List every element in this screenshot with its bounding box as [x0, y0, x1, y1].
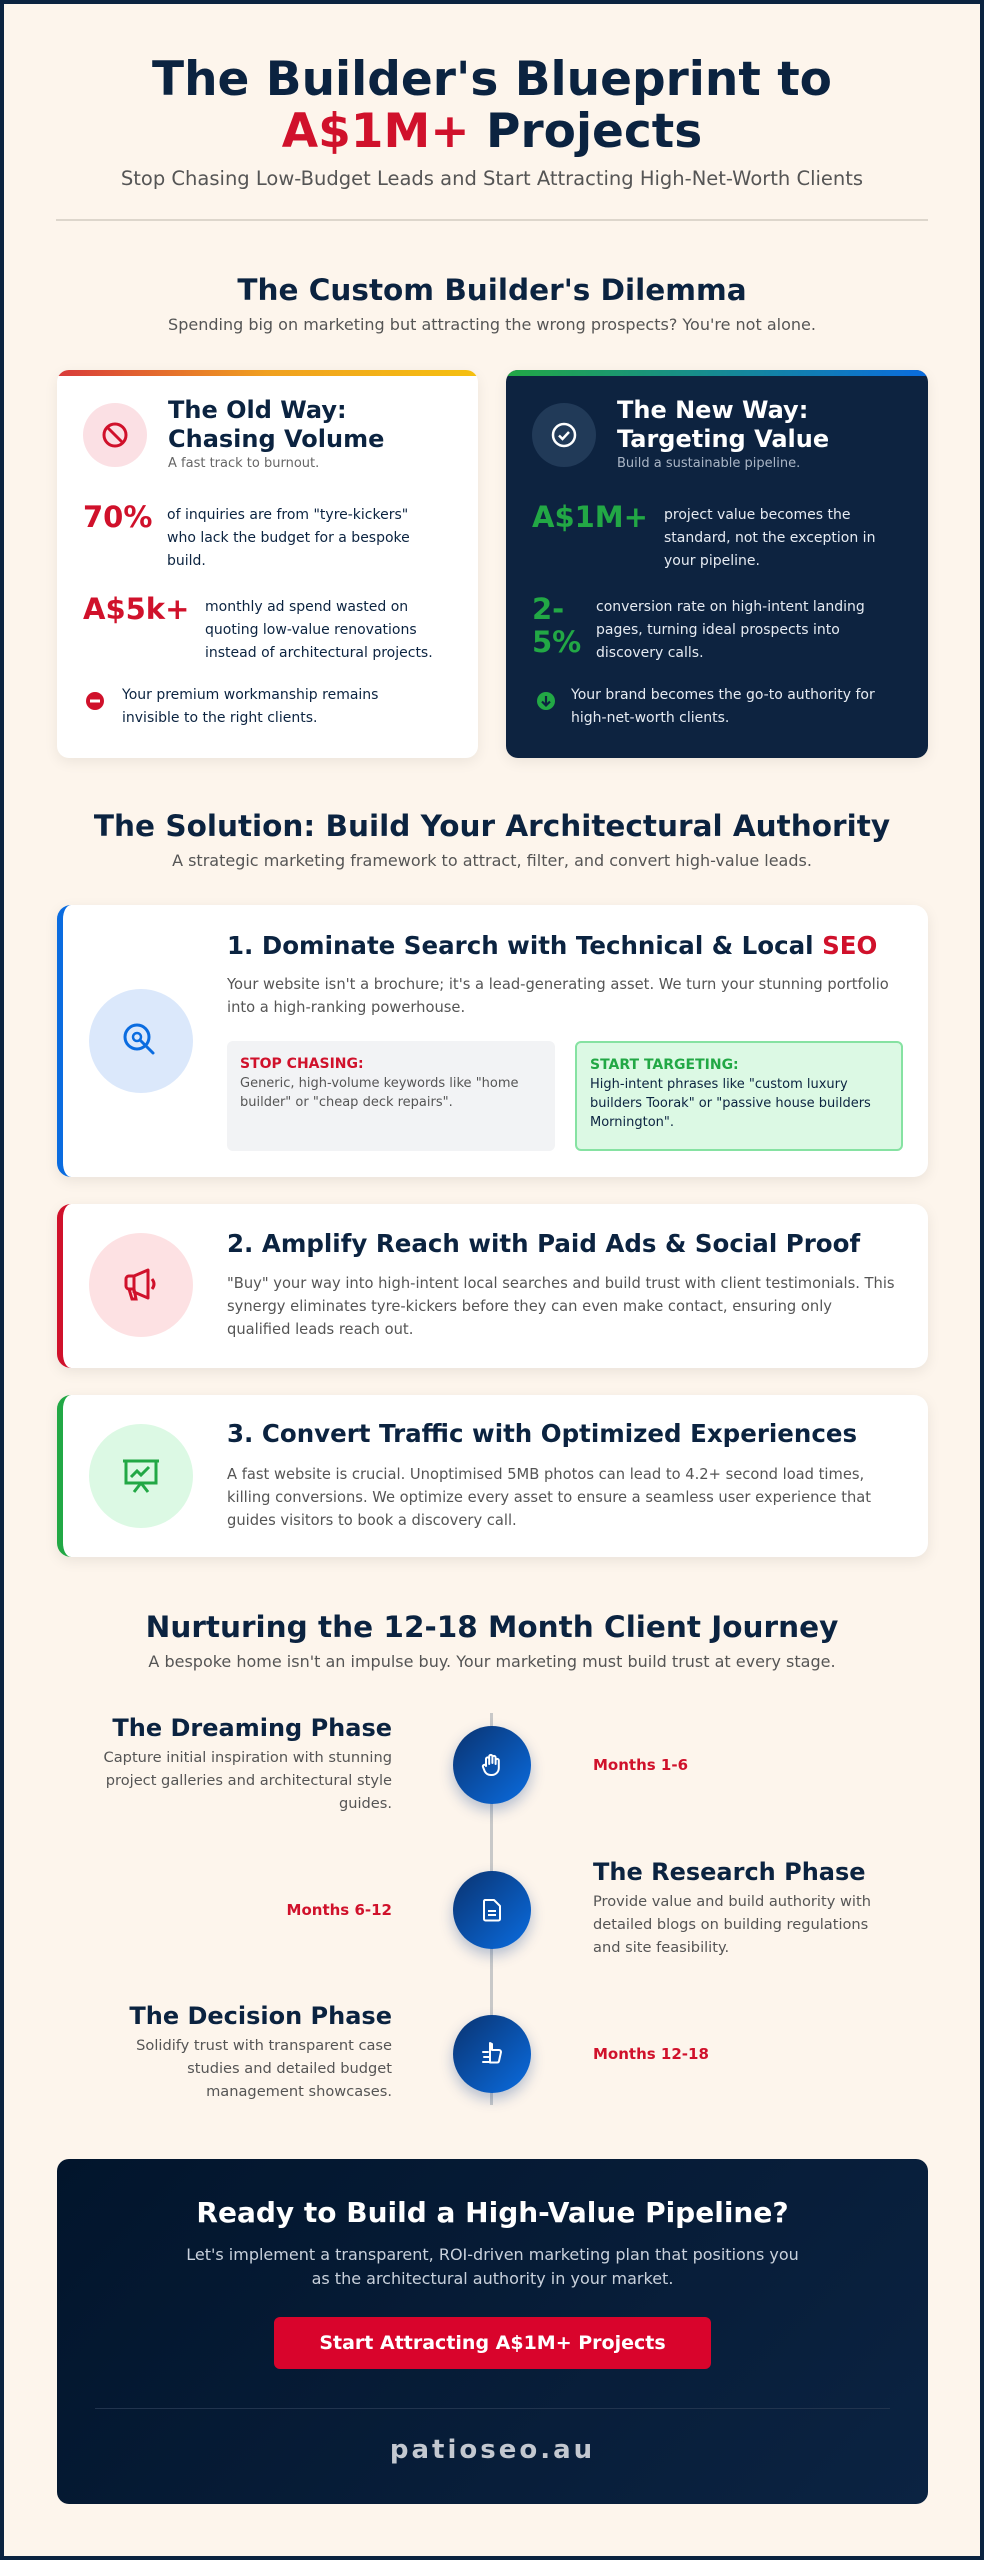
step 3 title: 3. Convert Traffic with Optimized Experiences	[227, 1419, 857, 1448]
timeline	[104, 1713, 871, 2106]
box: stop chasing	[227, 1041, 555, 1151]
months 6-12: Months 6-12	[287, 1901, 392, 1919]
box: start targeting: START TARGETING:	[590, 1057, 739, 1073]
panel: step 3 convert	[57, 1395, 928, 1557]
brand: patioseo.au	[390, 2435, 595, 2465]
step 1 text: Your website isn't a brochure; it's a lead-generating asset. We turn your stunning portfolio into a high-ranking powerhouse.	[227, 976, 889, 1016]
step 2 text: "Buy" your way into high-intent local searches and build trust with client testimonials. This synergy eliminates tyre-kickers before they can even make contact, ensuring only qualified leads reach out.	[227, 1275, 895, 1338]
heading: journey: Nurturing the 12-18 Month Client Journey	[146, 1610, 838, 1644]
stat 2-5%	[532, 592, 581, 659]
panel: new way	[506, 370, 928, 758]
icon: search	[89, 989, 193, 1093]
heading: dilemma: The Custom Builder's Dilemma	[237, 273, 747, 307]
step 1 title: 1. Dominate Search with Technical & Local SEO	[227, 931, 877, 960]
button	[274, 2317, 711, 2369]
icon: check	[532, 403, 596, 467]
panel: new way: Build a sustainable pipeline.	[617, 456, 800, 471]
phase: decision: The Decision Phase	[129, 2002, 392, 2030]
phase: dreaming	[104, 1714, 392, 1812]
CTA text: Let's implement a transparent, ROI-driven marketing plan that positions you	[186, 2245, 799, 2264]
new way heading: The New Way:	[617, 396, 808, 424]
bullet: invisible	[86, 692, 104, 710]
phase: decision	[129, 2002, 392, 2100]
title: The Builder's Blueprint to	[152, 52, 832, 107]
panel: step 1 SEO	[57, 905, 928, 1177]
icon: megaphone	[89, 1233, 193, 1337]
stat 70%: 70%	[83, 500, 152, 534]
panel: new way: Your brand becomes the go-to authority for high-net-worth clients.	[571, 687, 875, 726]
stat 2-5%: 5%	[532, 625, 581, 659]
title	[152, 52, 832, 159]
title: A$1M+ Projects	[282, 104, 702, 159]
CTA heading: Ready to Build a High-Value Pipeline?	[196, 2196, 789, 2229]
subtitle: Stop Chasing Low-Budget Leads and Start Attracting High-Net-Worth Clients	[121, 167, 863, 190]
phase: research	[593, 1858, 871, 1956]
months 12-18: Months 12-18	[593, 2045, 709, 2063]
months 1-6: Months 1-6	[593, 1756, 688, 1774]
icon: thumbs up	[453, 2015, 531, 2093]
journey subtitle: A bespoke home isn't an impulse buy. Your marketing must build trust at every stage.	[148, 1652, 836, 1671]
phase: dreaming: The Dreaming Phase	[112, 1714, 392, 1742]
bullet: authority	[537, 692, 555, 710]
heading: solution: The Solution: Build Your Architectural Authority	[94, 809, 890, 843]
panel: new way: conversion rate on high-intent landing pages, turning ideal prospects into discovery calls.	[596, 599, 865, 661]
panel: step 2 ads	[57, 1204, 928, 1368]
panel: old way	[57, 370, 478, 758]
dilemma subtitle: Spending big on marketing but attracting the wrong prospects? You're not alone.	[168, 315, 816, 334]
old way heading	[168, 396, 384, 453]
phase: research: Provide value and build authority with detailed blogs on building regulations and site feasibility.	[593, 1893, 871, 1956]
stat A$5k+: A$5k+	[83, 592, 189, 626]
step 2 title: 2. Amplify Reach with Paid Ads & Social Proof	[227, 1229, 860, 1258]
panel: old way: Your premium workmanship remains invisible to the right clients.	[122, 687, 378, 726]
CTA text: as the architectural authority in your market.	[312, 2269, 673, 2288]
new way heading	[617, 396, 829, 453]
panel: new way: project value becomes the standard, not the exception in your pipeline.	[664, 507, 875, 569]
box: stop chasing: Generic, high-volume keywords like "home builder" or "cheap deck repairs".	[240, 1076, 519, 1110]
box: start targeting: High-intent phrases like "custom luxury builders Toorak" or "passive house builders Mornington".	[590, 1077, 871, 1130]
panel: old way: of inquiries are from "tyre-kickers" who lack the budget for a bespoke build.	[167, 507, 410, 569]
solution subtitle: A strategic marketing framework to attract, filter, and convert high-value leads.	[172, 851, 812, 870]
panel: old way: monthly ad spend wasted on quoting low-value renovations instead of architectural projects.	[205, 599, 433, 661]
old way heading: The Old Way:	[168, 396, 347, 424]
stat A$1M+: A$1M+	[532, 500, 648, 534]
panel: CTA	[57, 2159, 928, 2504]
phase: research: The Research Phase	[593, 1858, 866, 1886]
phase: decision: Solidify trust with transparent case studies and detailed budget management showcases.	[136, 2037, 392, 2100]
icon: presentation chart	[89, 1424, 193, 1528]
icon: prohibited	[83, 403, 147, 467]
step 3 text: A fast website is crucial. Unoptimised 5MB photos can lead to 4.2+ second load times, killing conversions. We optimize every asset to ensure a seamless user experience that guides visitors to book a discovery call.	[227, 1466, 871, 1529]
CTA text	[186, 2245, 799, 2288]
stat 2-5%: 2-	[532, 592, 564, 626]
old way sub: A fast track to burnout.	[168, 456, 319, 471]
button: Start Attracting A$1M+ Projects	[319, 2332, 666, 2354]
icon: hand	[453, 1726, 531, 1804]
phase: dreaming: Capture initial inspiration with stunning project galleries and architectural style guides.	[104, 1749, 392, 1812]
box: start targeting	[575, 1041, 903, 1151]
box: stop chasing: STOP CHASING:	[240, 1056, 364, 1072]
old way heading: Chasing Volume	[168, 425, 384, 453]
new way heading: Targeting Value	[617, 425, 829, 453]
icon: document	[453, 1871, 531, 1949]
